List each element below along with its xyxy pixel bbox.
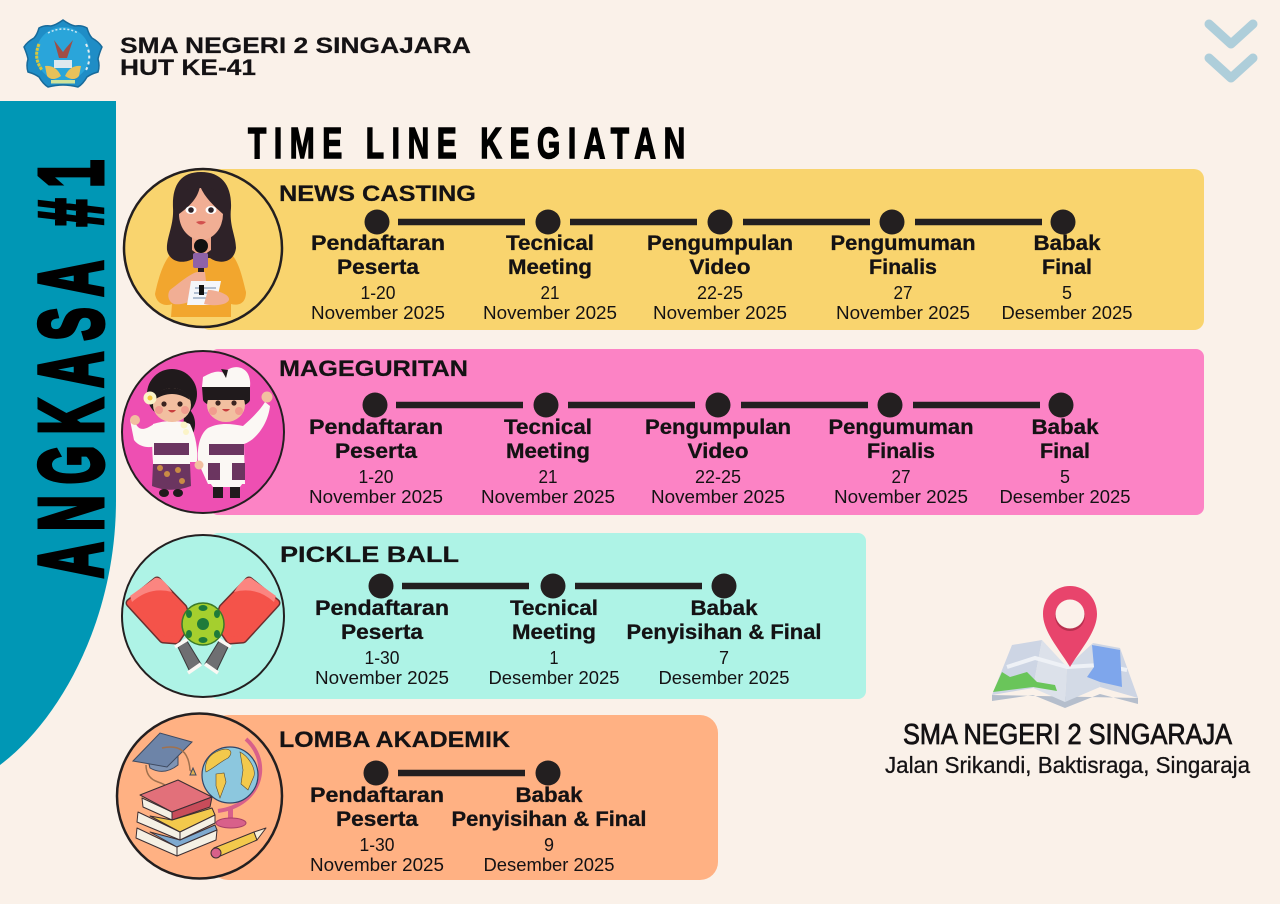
milestone labels: 21 (538, 467, 558, 487)
milestone labels: Desember 2025 (488, 668, 620, 688)
timeline (362, 392, 1074, 418)
milestone labels (310, 784, 646, 875)
milestone labels: Tecnical (506, 232, 594, 255)
milestone labels: 1-20 (358, 467, 394, 487)
milestone labels: Peserta (341, 621, 423, 644)
milestone labels: Pengumuman (830, 232, 976, 255)
milestone labels: Pendaftaran (309, 416, 443, 439)
timeline (364, 760, 560, 786)
milestone labels: Babak (516, 784, 583, 807)
milestone labels: Final (1040, 440, 1090, 463)
milestone labels: Peserta (335, 440, 417, 463)
milestone labels: Pendaftaran (311, 232, 445, 255)
milestone labels: 21 (540, 283, 560, 303)
milestone labels: 27 (892, 467, 910, 487)
milestone labels: 1-30 (364, 648, 400, 668)
milestone labels (311, 232, 1132, 323)
milestone labels: Pendaftaran (315, 597, 449, 620)
milestone labels: Tecnical (510, 597, 598, 620)
header text: SMA NEGERI 2 SINGAJARA (120, 33, 471, 58)
timeline (368, 574, 736, 598)
milestone labels: 5 (1060, 467, 1070, 487)
globe (202, 739, 260, 828)
milestone labels: Meeting (508, 256, 592, 279)
title: TIME LINE KEGIATAN (248, 118, 685, 167)
milestone labels: Finalis (869, 256, 937, 279)
sidebar title: ANGKASA #1 (21, 160, 122, 578)
pencil (211, 828, 266, 858)
milestone labels: Pengumuman (828, 416, 974, 439)
book stack (136, 780, 217, 856)
panel: lomba akademik (117, 714, 718, 880)
milestone labels: Babak (690, 597, 758, 620)
heading: LOMBA AKADEMIK (279, 727, 510, 752)
panel: pickle ball (122, 533, 866, 699)
girl (130, 369, 197, 497)
milestone labels: 9 (544, 835, 554, 855)
icon: pickleball paddles (122, 535, 284, 697)
milestone labels: Penyisihan & Final (452, 808, 646, 831)
milestone labels: Video (690, 256, 750, 279)
icon: school logo (24, 20, 102, 87)
milestone labels: Desember 2025 (658, 668, 790, 688)
icon: balinese children (122, 351, 284, 513)
milestone labels: 1-20 (360, 283, 396, 303)
graduation cap (133, 733, 196, 793)
milestone labels: November 2025 (310, 855, 444, 875)
icon: map with pin (992, 586, 1138, 708)
icon: books, globe and cap (117, 714, 282, 878)
milestone labels: 1-30 (360, 835, 394, 855)
milestone labels: November 2025 (834, 487, 968, 507)
milestone labels: Babak (1032, 416, 1099, 439)
milestone labels: 22-25 (695, 467, 741, 487)
panel: mageguritan (122, 349, 1204, 515)
heading: NEWS CASTING (279, 181, 476, 206)
milestone labels: Pendaftaran (310, 784, 444, 807)
milestone labels: November 2025 (315, 668, 449, 688)
milestone labels: Desember 2025 (1002, 303, 1132, 323)
milestone labels: November 2025 (311, 303, 445, 323)
milestone labels: November 2025 (309, 487, 443, 507)
milestone labels: Tecnical (504, 416, 592, 439)
location text (885, 719, 1250, 778)
milestone labels: November 2025 (836, 303, 970, 323)
milestone labels: Video (688, 440, 748, 463)
milestone labels: Pengumpulan (645, 416, 791, 439)
ball (182, 603, 224, 645)
milestone labels: 1 (550, 648, 558, 668)
milestone labels: Meeting (506, 440, 590, 463)
milestone labels: 22-25 (697, 283, 743, 303)
boy (194, 367, 272, 498)
milestone labels: 7 (719, 648, 729, 668)
milestone labels: November 2025 (481, 487, 615, 507)
icon: news reporter (124, 169, 282, 327)
heading: MAGEGURITAN (279, 356, 468, 381)
milestone labels: November 2025 (483, 303, 617, 323)
location text: Jalan Srikandi, Baktisraga, Singaraja (885, 752, 1250, 778)
milestone labels (309, 416, 1130, 507)
milestone labels: 27 (894, 283, 912, 303)
paddles (130, 578, 276, 673)
milestone labels: November 2025 (651, 487, 785, 507)
milestone labels: Desember 2025 (1000, 487, 1130, 507)
milestone labels (315, 597, 822, 688)
milestone labels: 5 (1062, 283, 1072, 303)
location text: SMA NEGERI 2 SINGARAJA (903, 719, 1233, 751)
milestone labels: Final (1042, 256, 1092, 279)
milestone labels: Meeting (512, 621, 596, 644)
milestone labels: Babak (1034, 232, 1101, 255)
milestone labels: Penyisihan & Final (626, 621, 822, 644)
header text (120, 33, 471, 80)
timeline (364, 210, 1076, 234)
milestone labels: Desember 2025 (484, 855, 614, 875)
header text: HUT KE-41 (120, 55, 256, 80)
panel: news casting (124, 169, 1204, 330)
milestone labels: Finalis (867, 440, 935, 463)
milestone labels: Peserta (336, 808, 418, 831)
icon: double chevron (1209, 24, 1253, 78)
milestone labels: Peserta (337, 256, 419, 279)
heading: PICKLE BALL (280, 542, 459, 567)
panel: sidebar (0, 101, 122, 765)
milestone labels: November 2025 (653, 303, 787, 323)
milestone labels: Pengumpulan (647, 232, 793, 255)
